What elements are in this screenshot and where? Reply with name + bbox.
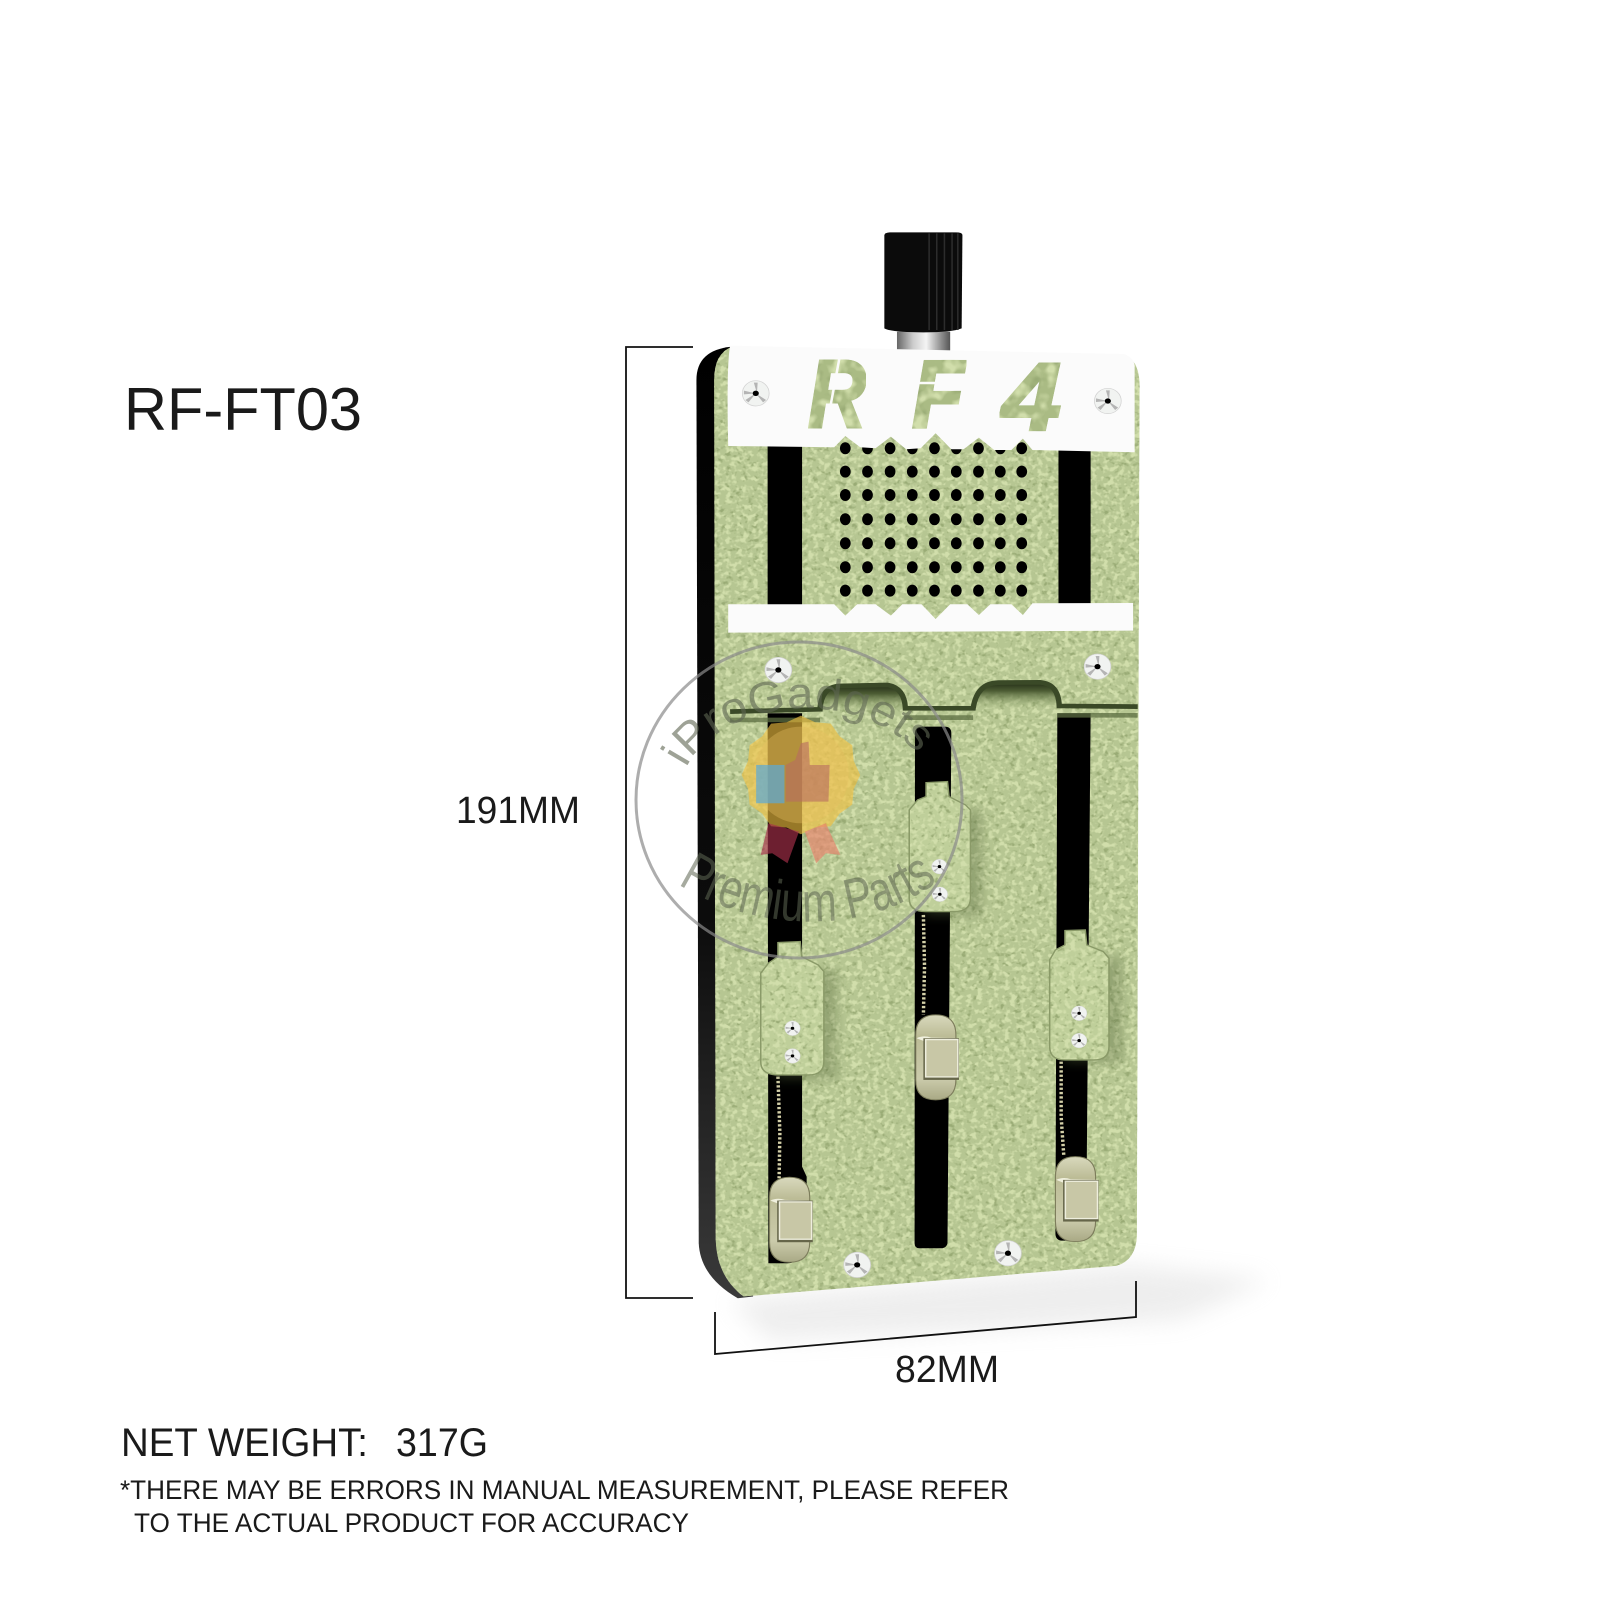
spring centre xyxy=(923,915,925,1015)
measurement disclaimer: *THERE MAY BE ERRORS IN MANUAL MEASUREMENT, PLEASE REFER xyxy=(120,1475,1009,1505)
RF4 stencil lettering xyxy=(808,341,1061,451)
RF4 stencil lettering: F xyxy=(912,341,966,448)
notch shading right xyxy=(977,682,1059,708)
height label: 191MM xyxy=(456,790,580,832)
height dimension bracket xyxy=(626,347,693,1298)
lower left slot xyxy=(768,713,807,1263)
ground shadow xyxy=(730,1265,1270,1340)
small screws left tab xyxy=(785,1021,800,1063)
watermark ring and lettering xyxy=(634,640,964,960)
net weight: 317G xyxy=(396,1421,488,1465)
right slider tab xyxy=(1050,930,1109,1060)
width label: 82MM xyxy=(895,1349,999,1391)
lower right slot xyxy=(1055,713,1094,1241)
RF4 stencil lettering: R xyxy=(808,341,866,448)
raised plate stepped edge xyxy=(730,682,1138,720)
screw mid right xyxy=(1084,654,1111,679)
top white plate with teeth xyxy=(728,346,1135,452)
top left slot xyxy=(768,433,802,605)
screw top left xyxy=(742,381,769,406)
hole grid xyxy=(840,442,1027,597)
right metal clip xyxy=(1055,1157,1099,1242)
screw top right xyxy=(1094,388,1121,414)
RF4 stencil lettering: 4 xyxy=(1000,344,1061,451)
spring left xyxy=(778,1077,780,1178)
model title: RF-FT03 xyxy=(124,376,362,443)
width dimension bracket xyxy=(715,1281,1136,1354)
net weight: NET WEIGHT: xyxy=(121,1421,368,1465)
slider tab shadows xyxy=(776,810,1122,1080)
product illustration xyxy=(696,232,1140,1298)
small screws right tab xyxy=(1071,1006,1087,1048)
lower centre slot xyxy=(915,727,951,1248)
watermark ring and lettering: Premium Parts xyxy=(680,852,934,922)
plate black side xyxy=(696,347,753,1298)
centre slider tab xyxy=(909,782,970,912)
centre metal clip xyxy=(916,1015,959,1100)
spring right xyxy=(1061,1062,1064,1157)
left slider tab xyxy=(761,942,824,1075)
watermark ring and lettering: iProGadgets xyxy=(660,678,930,765)
left metal clip xyxy=(770,1177,813,1262)
measurement disclaimer xyxy=(120,1475,1009,1538)
notch shading left xyxy=(820,684,905,712)
small screws centre tab xyxy=(932,859,948,902)
black knurled knob xyxy=(884,232,962,332)
measurement disclaimer: TO THE ACTUAL PRODUCT FOR ACCURACY xyxy=(134,1508,689,1538)
screw bottom left xyxy=(844,1252,871,1278)
plate textured green face xyxy=(714,347,1140,1297)
knob neck xyxy=(897,332,950,352)
top right slot xyxy=(1058,433,1091,605)
watermark badge rosette xyxy=(742,716,860,863)
lower white bar with teeth xyxy=(728,603,1133,633)
screw mid left xyxy=(765,657,792,683)
screw bottom right xyxy=(995,1241,1021,1266)
